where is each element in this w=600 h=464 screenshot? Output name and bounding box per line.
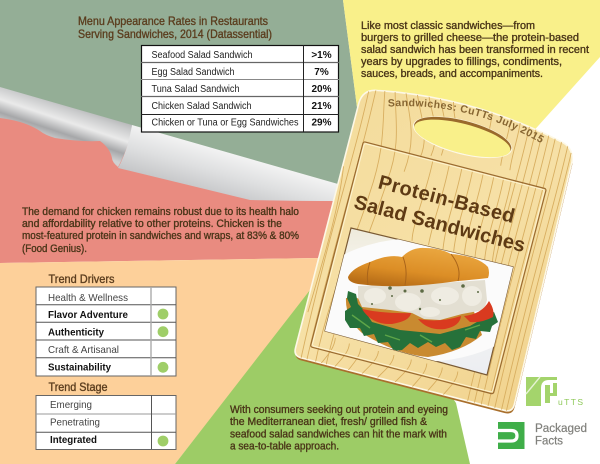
logo: Packaged Facts: Facts <box>535 436 563 448</box>
heading: trend drivers: Trend Drivers <box>48 272 114 286</box>
table: trend drivers: Health & Wellness <box>48 292 128 304</box>
filling <box>358 280 487 320</box>
text block: intro on yellow: Like most classic sandwiches—from <box>361 20 535 32</box>
icon: chef knife <box>0 87 345 201</box>
logo: CuTTS: uTTS <box>558 397 583 407</box>
bottom bread <box>346 298 482 357</box>
text block: intro on yellow <box>361 20 589 80</box>
table: menu appearance rates: 21% <box>311 101 332 112</box>
text block: intro on yellow: burgers to grilled cheese—the protein-based <box>361 32 579 44</box>
logo: CuTTS <box>526 377 583 407</box>
table: trend drivers: Sustainability <box>48 362 111 374</box>
table: menu appearance rates: Chicken or Tuna or Egg Sandwiches <box>152 118 298 128</box>
board subheading: Salad Sandwiches <box>352 192 528 257</box>
title: menu appearance rates: Serving Sandwiches, 2014 (Datassential) <box>78 27 272 41</box>
text block: seafood on green: a sea-to-table approach. <box>230 440 339 452</box>
board heading arc: Sandwiches: CuTTs July 2015 <box>388 98 544 142</box>
text block: seafood on green: seafood salad sandwiches can hit the mark with <box>230 428 447 440</box>
table: menu appearance rates <box>141 45 339 132</box>
text block: chicken demand: and affordability relative to other proteins. Chicken is the <box>22 218 282 230</box>
logo: Packaged Facts: Packaged <box>535 423 587 435</box>
table: menu appearance rates: 29% <box>311 118 332 128</box>
text block: seafood on green: the Mediterranean diet, fresh/ grilled fish & <box>230 416 428 428</box>
text block: intro on yellow: salad sandwich has been transformed in recent <box>361 44 589 56</box>
text block: intro on yellow: years by upgrades to fillings, condiments, <box>361 56 562 68</box>
text block: chicken demand: The demand for chicken remains robust due to its health halo <box>22 206 299 218</box>
text block: intro on yellow: sauces, breads, and accompaniments. <box>361 68 543 80</box>
table: trend drivers: Craft & Artisanal <box>48 344 119 356</box>
cutting board <box>294 90 573 414</box>
logo: Packaged Facts <box>498 422 587 449</box>
table: trend drivers: Authenticity <box>48 326 104 338</box>
croissant top <box>348 248 489 286</box>
heading: trend stage: Trend Stage <box>48 380 108 394</box>
panel: gray-green menu wedge <box>0 0 358 190</box>
panel: salmon chicken wedge <box>0 100 345 263</box>
table: menu appearance rates: Seafood Salad Sandwich <box>152 50 252 61</box>
panel: green seafood wedge <box>175 290 470 464</box>
lettuce <box>345 291 498 351</box>
text block: seafood on green: With consumers seeking out protein and eyeing <box>230 404 448 416</box>
title: menu appearance rates: Menu Appearance Rates in Restaurants <box>78 14 268 28</box>
table: menu appearance rates: 7% <box>314 67 329 78</box>
table: menu appearance rates: Chicken Salad Sandwich <box>152 101 252 112</box>
board heading: Protein-Based <box>376 172 517 228</box>
table: trend drivers <box>36 287 176 376</box>
title: menu appearance rates <box>78 14 272 41</box>
text block: seafood on green <box>230 404 448 452</box>
photo: chicken salad sandwich on croissant <box>324 227 514 376</box>
board frame <box>310 142 546 394</box>
board handle hole <box>409 108 516 166</box>
table: trend stage: Emerging <box>50 399 92 411</box>
table: menu appearance rates: Tuna Salad Sandwich <box>152 84 240 95</box>
table: menu appearance rates: Egg Salad Sandwich <box>152 67 234 78</box>
table: trend drivers: Flavor Adventure <box>48 309 128 321</box>
tomatoes <box>362 309 411 324</box>
table: trend stage: Penetrating <box>50 416 100 428</box>
table: menu appearance rates: 20% <box>311 84 332 95</box>
text block: chicken demand <box>22 206 299 255</box>
text block: chicken demand: most-featured protein in sandwiches and wraps, at 83% & 80% <box>22 230 299 242</box>
panel: yellow intro wedge <box>343 0 600 160</box>
table: trend stage <box>36 395 176 450</box>
table: menu appearance rates: >1% <box>311 50 332 61</box>
text block: chicken demand: (Food Genius). <box>22 243 87 255</box>
panel: orange trends wedge <box>0 258 318 464</box>
table: trend stage: Integrated <box>50 434 97 446</box>
